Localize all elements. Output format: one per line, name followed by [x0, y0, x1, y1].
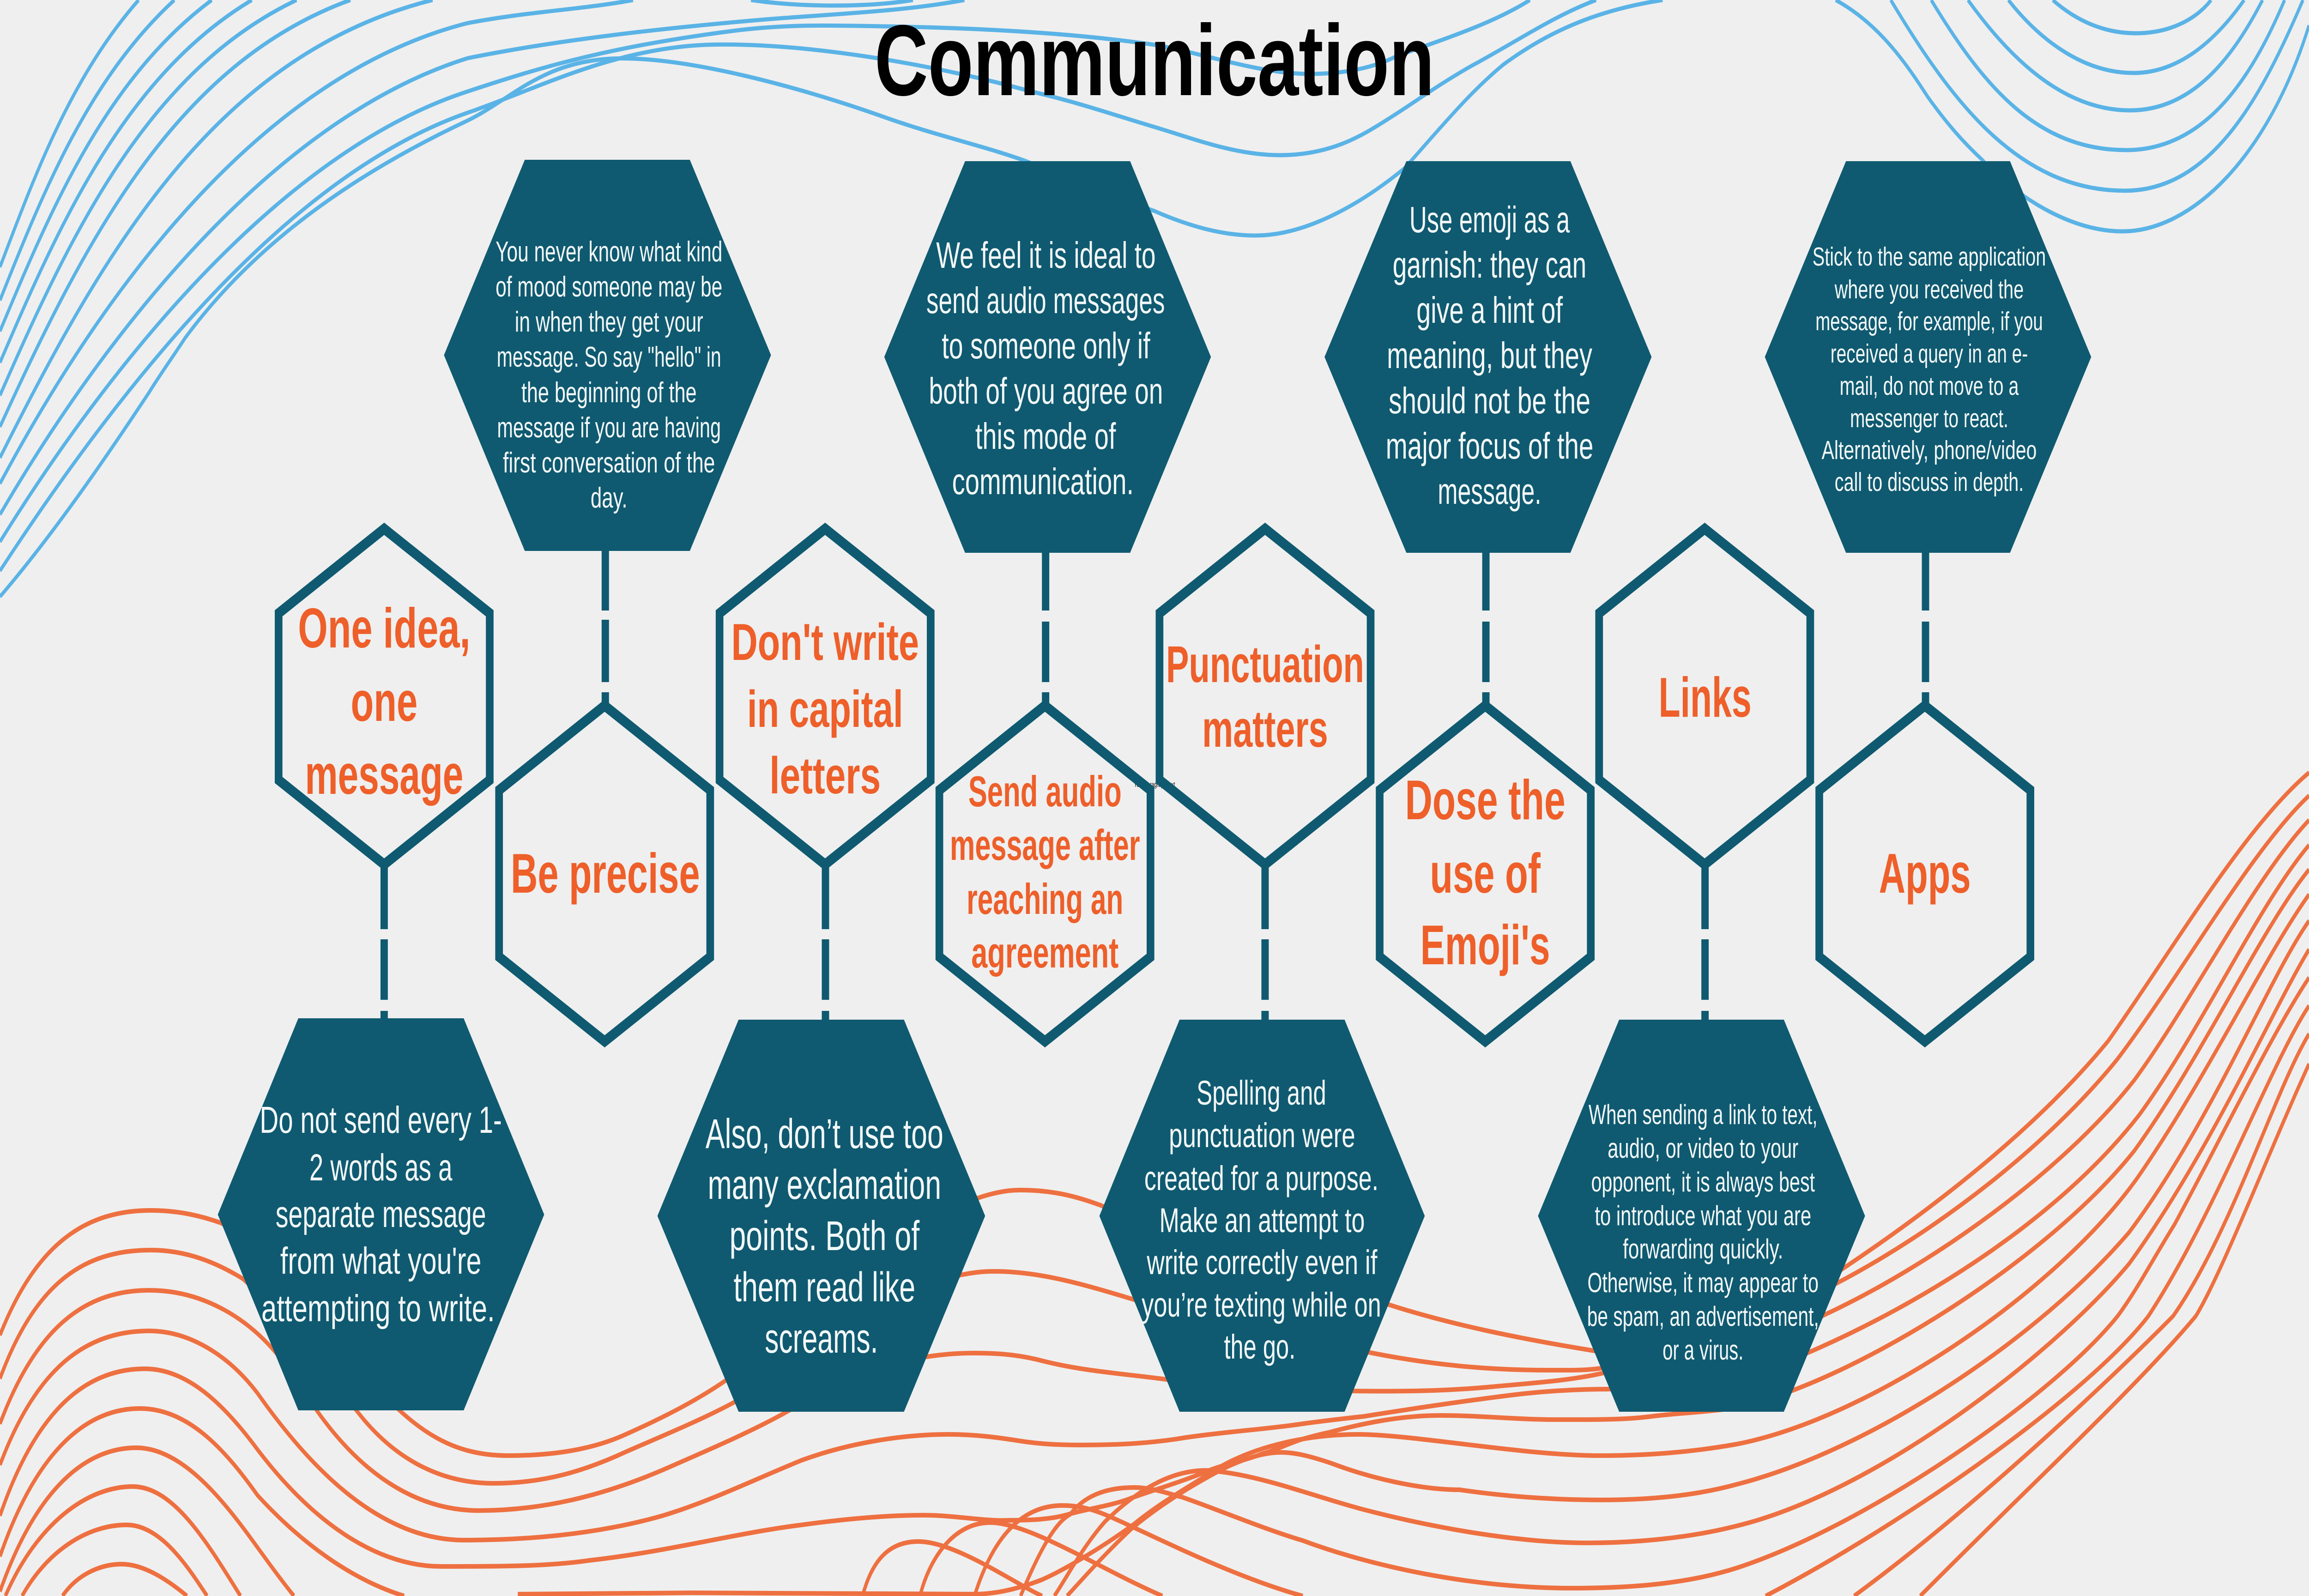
connector: One idea: [381, 864, 388, 1020]
outline hexagon: Don't write in capital letters: [719, 529, 931, 864]
filled hexagon: When sending a link: [1538, 1020, 1865, 1412]
filled hexagon: When sending a link: forwarding quickly.: [1623, 1234, 1783, 1265]
connector: Send audio: [1042, 551, 1049, 707]
outline hexagon: One idea, one message: [278, 529, 490, 864]
filled hexagon: Stick to the same application: received a query in an e-: [1831, 339, 2028, 369]
outline hexagon: Send audio message after reaching an agreement: message after: [950, 821, 1140, 870]
filled hexagon: You never know: day.: [591, 482, 628, 514]
filled hexagon: Use emoji as a garnish: garnish: they can: [1393, 244, 1586, 285]
filled hexagon: We feel it is ideal: [884, 161, 1211, 553]
filled hexagon: Also, don't use too many: screams.: [765, 1315, 878, 1361]
filled hexagon: We feel it is ideal: to someone only if: [942, 325, 1150, 366]
filled hexagon: When sending a link: Otherwise, it may appear to: [1588, 1268, 1819, 1299]
outline hexagon: Links: Links: [1659, 666, 1752, 729]
filled hexagon: Do not send every: attempting to write.: [261, 1288, 495, 1330]
filled hexagon: When sending a link: When sending a link to text,: [1589, 1100, 1818, 1130]
connector: Be precise: [602, 550, 609, 707]
outline hexagon: One idea, one message: one: [351, 670, 417, 733]
filled hexagon: Also, don't use too many: them read like: [734, 1264, 915, 1310]
filled hexagon: You never know: of mood someone may be: [496, 271, 722, 303]
outline hexagon: Apps: [1819, 706, 2031, 1041]
outline hexagon: Be precise: [499, 706, 710, 1041]
filled hexagon: Use emoji as a garnish: should not be the: [1389, 380, 1590, 421]
filled hexagon: We feel it is ideal: We feel it is ideal to: [936, 235, 1156, 276]
filled hexagon: You never know: the beginning of the: [521, 377, 697, 409]
filled hexagon: Use emoji as a garnish: [1324, 161, 1651, 553]
connector: Apps: [1922, 551, 1929, 707]
filled hexagon: We feel it is ideal: both of you agree on: [929, 370, 1163, 411]
outline hexagon: Links: [1599, 529, 1810, 864]
filled hexagon: Spelling and punctuation: Spelling and: [1197, 1074, 1326, 1112]
filled hexagon: When sending a link: or a virus.: [1662, 1335, 1743, 1366]
filled hexagon: Stick to the same application: Stick to the same application: [1813, 242, 2046, 272]
filled hexagon: Stick to the same application: mail, do not move to a: [1840, 371, 2019, 401]
filled hexagon: Stick to the same application: where you received the: [1834, 274, 2024, 304]
filled hexagon: Spelling and punctuation: Make an attempt to: [1159, 1202, 1365, 1239]
tiny placeholder text: Your paragraph text: [1134, 780, 1175, 788]
connector: Dose the use of Emoji's: [1482, 551, 1490, 707]
outline hexagon: Apps: Apps: [1879, 842, 1971, 905]
filled hexagon: Use emoji as a garnish: major focus of the: [1386, 425, 1594, 466]
filled hexagon: Also, don't use too many: many exclamation: [707, 1161, 941, 1208]
outline hexagon: Send audio message after reaching an agreement: [939, 706, 1150, 1041]
filled hexagon: Stick to the same application: messenger to react.: [1850, 403, 2008, 433]
outline hexagon: Don't write in capital letters: Don't write: [731, 613, 919, 671]
title: Communication: [875, 5, 1434, 117]
filled hexagon: Spelling and punctuation: [1100, 1020, 1425, 1412]
filled hexagon: Use emoji as a garnish: give a hint of: [1416, 290, 1563, 331]
blue wave lines: top background: [0, 0, 2309, 597]
outline hexagon: Send audio message after reaching an agreement: Send audio: [968, 768, 1122, 816]
outline hexagon: Send audio message after reaching an agreement: reaching an: [967, 875, 1123, 924]
outline hexagon: Be precise: Be precise: [511, 842, 700, 905]
filled hexagon: You never know: in when they get your: [515, 306, 703, 338]
filled hexagon: Also, don't use too many: Also, don’t use too: [706, 1111, 943, 1157]
filled hexagon: Do not send every: 2 words as a: [309, 1147, 453, 1189]
filled hexagon: Stick to the same application: [1765, 161, 2091, 553]
connector: Links: [1701, 864, 1709, 1021]
filled hexagon: Do not send every: Do not send every 1-: [260, 1099, 502, 1141]
connector: Don't write: [822, 864, 829, 1021]
connector: Punctuation matters: [1261, 864, 1269, 1021]
filled hexagon: Do not send every: from what you're: [280, 1240, 481, 1282]
filled hexagon: Stick to the same application: Alternatively, phone/video: [1822, 435, 2037, 465]
filled hexagon: Use emoji as a garnish: Use emoji as a: [1409, 199, 1570, 240]
outline hexagon: Punctuation matters: [1160, 529, 1371, 864]
outline hexagon: Send audio message after reaching an agreement: agreement: [971, 929, 1118, 977]
filled hexagon: Stick to the same application: call to discuss in depth.: [1835, 467, 2024, 497]
filled hexagon: When sending a link: to introduce what you are: [1595, 1201, 1811, 1232]
filled hexagon: Spelling and punctuation: you’re texting while on: [1142, 1286, 1381, 1324]
filled hexagon: When sending a link: opponent, it is always best: [1591, 1167, 1815, 1198]
filled hexagon: Do not send every: [218, 1018, 544, 1410]
filled hexagon: Spelling and punctuation: write correctly even if: [1147, 1244, 1378, 1282]
outline hexagon: Dose the use of Emoji's: Dose the: [1405, 768, 1566, 831]
filled hexagon: We feel it is ideal: send audio messages: [926, 280, 1165, 321]
outline hexagon: Punctuation matters: matters: [1202, 700, 1328, 758]
filled hexagon: We feel it is ideal: this mode of: [975, 416, 1116, 457]
outline hexagon: Dose the use of Emoji's: [1380, 706, 1591, 1041]
outline hexagon: Dose the use of Emoji's: Emoji's: [1420, 913, 1550, 976]
filled hexagon: You never know: You never know what kind: [496, 236, 722, 268]
filled hexagon: You never know: first conversation of the: [503, 447, 715, 479]
orange wave lines: bottom background: [0, 773, 2309, 1596]
outline hexagon: One idea, one message: One idea,: [298, 597, 471, 659]
filled hexagon: You never know: [444, 160, 771, 551]
filled hexagon: Stick to the same application: message, for example, if you: [1815, 306, 2043, 336]
filled hexagon: Spelling and punctuation: punctuation were: [1169, 1117, 1355, 1155]
filled hexagon: Do not send every: separate message: [276, 1193, 486, 1235]
outline hexagon: Punctuation matters: Punctuation: [1166, 635, 1364, 693]
filled hexagon: Use emoji as a garnish: meaning, but they: [1387, 335, 1592, 376]
outline hexagon: One idea, one message: message: [305, 743, 463, 806]
filled hexagon: You never know: message if you are having: [497, 412, 721, 444]
filled hexagon: Also, don't use too many: points. Both of: [729, 1213, 919, 1259]
filled hexagon: When sending a link: audio, or video to your: [1608, 1133, 1798, 1164]
outline hexagon: Don't write in capital letters: letters: [769, 747, 881, 804]
filled hexagon: Spelling and punctuation: created for a purpose.: [1144, 1160, 1378, 1197]
filled hexagon: Spelling and punctuation: the go.: [1224, 1328, 1295, 1366]
outline hexagon: Dose the use of Emoji's: use of: [1430, 842, 1541, 905]
filled hexagon: Use emoji as a garnish: message.: [1438, 471, 1541, 512]
filled hexagon: When sending a link: be spam, an advertisement,: [1587, 1301, 1819, 1332]
filled hexagon: You never know: message. So say "hello" in: [497, 341, 721, 373]
outline hexagon: Don't write in capital letters: in capital: [747, 680, 903, 738]
filled hexagon: Also, don't use too many: [658, 1020, 985, 1412]
filled hexagon: We feel it is ideal: communication.: [952, 461, 1134, 502]
